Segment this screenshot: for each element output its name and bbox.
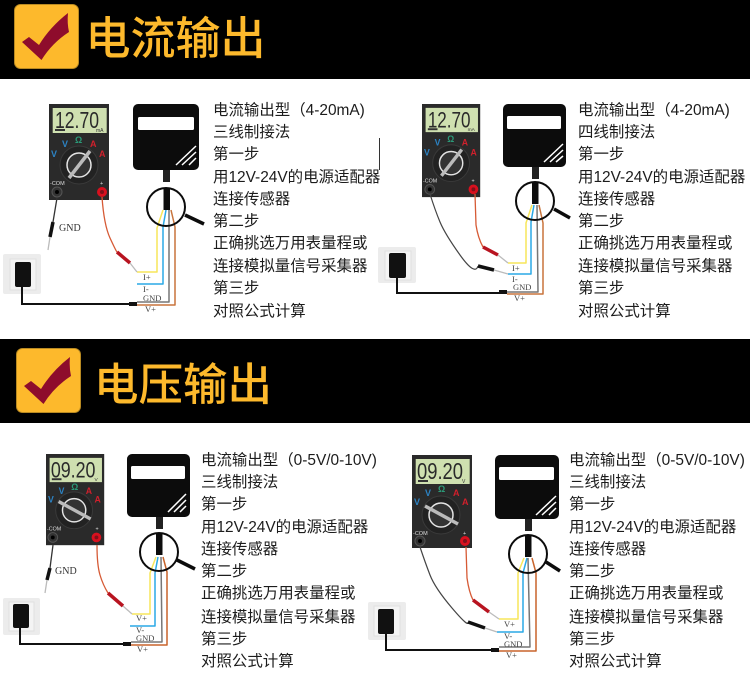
multimeter: + (100, 181, 103, 187)
text block: current output, three-wire steps: 电流输出型（4-20mA) (213, 101, 365, 119)
magnifier (516, 182, 570, 220)
text block: current output, three-wire steps: 第三步 (213, 279, 259, 297)
multimeter: mA (468, 127, 476, 133)
wire labels: V+ (145, 304, 156, 314)
text block: voltage output, first three-wire steps: 用12V-24V的电源适配器 (201, 518, 368, 536)
multimeter: V (94, 477, 98, 483)
wires (507, 205, 543, 294)
text block: current output, four-wire steps: 用12V-24V的电源适配器 (578, 168, 745, 186)
text block: current output, three-wire steps (213, 101, 380, 320)
text block: voltage output, first three-wire steps: 三线制接法 (201, 473, 278, 491)
wire labels: V+ (514, 293, 525, 303)
header band: voltage output (0, 339, 750, 423)
multimeter: V (51, 149, 57, 159)
multimeter: Ω (71, 482, 78, 492)
text block: current output, three-wire steps: 第二步 (213, 212, 259, 230)
wire labels (136, 613, 154, 654)
power adapter and socket (368, 602, 499, 652)
wire labels: V- (136, 625, 144, 635)
multimeter: A (462, 497, 469, 507)
multimeter: A (99, 149, 106, 159)
magnifier (509, 535, 560, 573)
wire labels: I- (512, 274, 518, 284)
black probe (48, 198, 81, 250)
wire labels: GND (143, 293, 161, 303)
multimeter: 12.70 (428, 107, 470, 132)
black probe (45, 545, 77, 593)
power adapter and socket (3, 598, 131, 646)
text block: current output, three-wire steps: 对照公式计算 (213, 301, 306, 320)
text block: voltage output, second three-wire steps (569, 451, 745, 670)
wire labels (143, 272, 161, 314)
text block: current output, three-wire steps: 用12V-24V的电源适配器 (213, 168, 380, 186)
black probe (420, 547, 497, 632)
multimeter: + (463, 531, 466, 537)
text block: current output, four-wire steps: 连接传感器 (578, 190, 655, 208)
heading: current output: 电流输出 (86, 13, 266, 64)
text block: voltage output, second three-wire steps: 第一步 (569, 495, 615, 513)
sensor device (133, 104, 199, 182)
power adapter and socket (3, 254, 137, 306)
wire labels: V+ (137, 644, 148, 654)
sensor device (495, 455, 559, 531)
text block: voltage output, first three-wire steps: 正确挑选万用表量程或 (201, 584, 355, 602)
black probe: GND (55, 566, 77, 577)
magnifier (147, 188, 204, 226)
red probe (466, 547, 499, 619)
wire labels: GND (504, 639, 522, 649)
wires (137, 210, 175, 305)
text block: voltage output, second three-wire steps: 用12V-24V的电源适配器 (569, 518, 736, 536)
text block: current output, four-wire steps: 电流输出型（4-20mA) (578, 101, 730, 119)
wire labels: GND (136, 633, 154, 643)
multimeter: Ω (438, 484, 445, 494)
multimeter: mA (96, 128, 104, 134)
multimeter: V (62, 139, 68, 149)
panel: voltage output, three-wire diagram (3, 454, 195, 654)
text block: voltage output, first three-wire steps: 第二步 (201, 562, 247, 580)
text block: current output, four-wire steps: 四线制接法 (578, 123, 655, 141)
text block: voltage output, first three-wire steps: 连接传感器 (201, 540, 278, 558)
multimeter: A (86, 486, 93, 496)
text block: voltage output, second three-wire steps: 电流输出型（0-5V/0-10V) (569, 451, 745, 469)
text block: current output, four-wire steps: 正确挑选万用表量程或 (578, 234, 732, 252)
wire labels: I+ (143, 272, 151, 282)
text block: voltage output, first three-wire steps: 对照公式计算 (201, 651, 294, 670)
text block: voltage output, first three-wire steps: 第三步 (201, 630, 247, 648)
multimeter: V (425, 488, 431, 498)
wire labels: V+ (504, 619, 515, 629)
heading: voltage output: 电压输出 (94, 361, 272, 410)
red probe (97, 545, 132, 614)
multimeter: Ω (447, 134, 454, 144)
black probe (430, 194, 508, 274)
text block: current output, four-wire steps (578, 101, 745, 320)
wire labels: V+ (136, 613, 147, 623)
text block: voltage output, second three-wire steps: 连接模拟量信号采集器 (569, 608, 723, 626)
multimeter: -COM (50, 181, 65, 187)
text block: voltage output, first three-wire steps: 电流输出型（0-5V/0-10V) (201, 451, 377, 469)
multimeter: V (48, 494, 54, 504)
text block: voltage output, second three-wire steps: 对照公式计算 (569, 651, 662, 670)
multimeter: A (94, 494, 101, 504)
icon: check mark badge (16, 348, 80, 412)
text block: current output, three-wire steps: 正确挑选万用表量程或 (213, 234, 367, 252)
multimeter: -COM (413, 531, 428, 537)
red probe (475, 194, 508, 263)
wire labels: I+ (512, 263, 520, 273)
text block: current output, four-wire steps: 第三步 (578, 279, 624, 297)
multimeter: A (462, 138, 469, 148)
text block: voltage output, second three-wire steps: 第二步 (569, 562, 615, 580)
header band: current output (0, 0, 750, 79)
multimeter: 12.70 (55, 107, 99, 133)
multimeter: -COM (47, 527, 61, 533)
power adapter and socket (378, 247, 507, 294)
panel: current output, four-wire diagram (378, 104, 570, 303)
multimeter (46, 454, 104, 545)
multimeter: + (471, 179, 475, 185)
text block: current output, three-wire steps: 连接模拟量信号采集器 (213, 257, 367, 275)
text block: current output, four-wire steps: 连接模拟量信号采集器 (578, 257, 732, 275)
multimeter: 09.20 (417, 458, 463, 484)
text block: current output, four-wire steps: 第一步 (578, 145, 624, 163)
multimeter: + (95, 527, 99, 533)
magnifier (140, 533, 195, 571)
sensor device (127, 454, 190, 529)
sensor device (503, 104, 566, 179)
wire labels (512, 263, 531, 303)
wire labels (504, 619, 522, 660)
multimeter: A (470, 147, 477, 157)
text block: current output, four-wire steps: 对照公式计算 (578, 301, 671, 320)
multimeter: V (59, 486, 65, 496)
wires (130, 557, 167, 645)
text block: voltage output, first three-wire steps: 连接模拟量信号采集器 (201, 608, 355, 626)
text block: voltage output, second three-wire steps: 连接传感器 (569, 540, 646, 558)
multimeter: Ω (75, 135, 82, 145)
multimeter (412, 455, 472, 548)
multimeter: V (462, 479, 466, 485)
text block: current output, three-wire steps: 连接传感器 (213, 190, 290, 208)
multimeter: V (424, 147, 430, 157)
text block: voltage output, first three-wire steps (201, 451, 377, 670)
multimeter: A (90, 139, 97, 149)
icon: check mark badge (14, 4, 78, 68)
text block: current output, four-wire steps: 第二步 (578, 212, 624, 230)
wires (497, 558, 536, 651)
text block: current output, three-wire steps: 第一步 (213, 145, 259, 163)
wire labels: GND (513, 282, 531, 292)
text block: voltage output, second three-wire steps: 正确挑选万用表量程或 (569, 584, 723, 602)
red probe (102, 197, 137, 272)
multimeter: A (453, 488, 460, 498)
text block: current output, three-wire steps: 三线制接法 (213, 123, 290, 141)
multimeter (49, 104, 109, 200)
text block: voltage output, first three-wire steps: 第一步 (201, 495, 247, 513)
panel: voltage output, second diagram (368, 455, 560, 660)
multimeter: 09.20 (51, 457, 95, 482)
text block: voltage output, second three-wire steps: 三线制接法 (569, 473, 646, 491)
multimeter (422, 104, 480, 197)
wire labels: I- (143, 284, 149, 294)
multimeter: V (435, 138, 441, 148)
text block: voltage output, second three-wire steps: 第三步 (569, 630, 615, 648)
multimeter: V (414, 497, 420, 507)
wire labels: V- (504, 631, 512, 641)
wire labels: V+ (506, 650, 517, 660)
black probe: GND (59, 223, 81, 234)
multimeter: -COM (423, 179, 437, 185)
panel: current output, three-wire diagram (3, 104, 204, 314)
